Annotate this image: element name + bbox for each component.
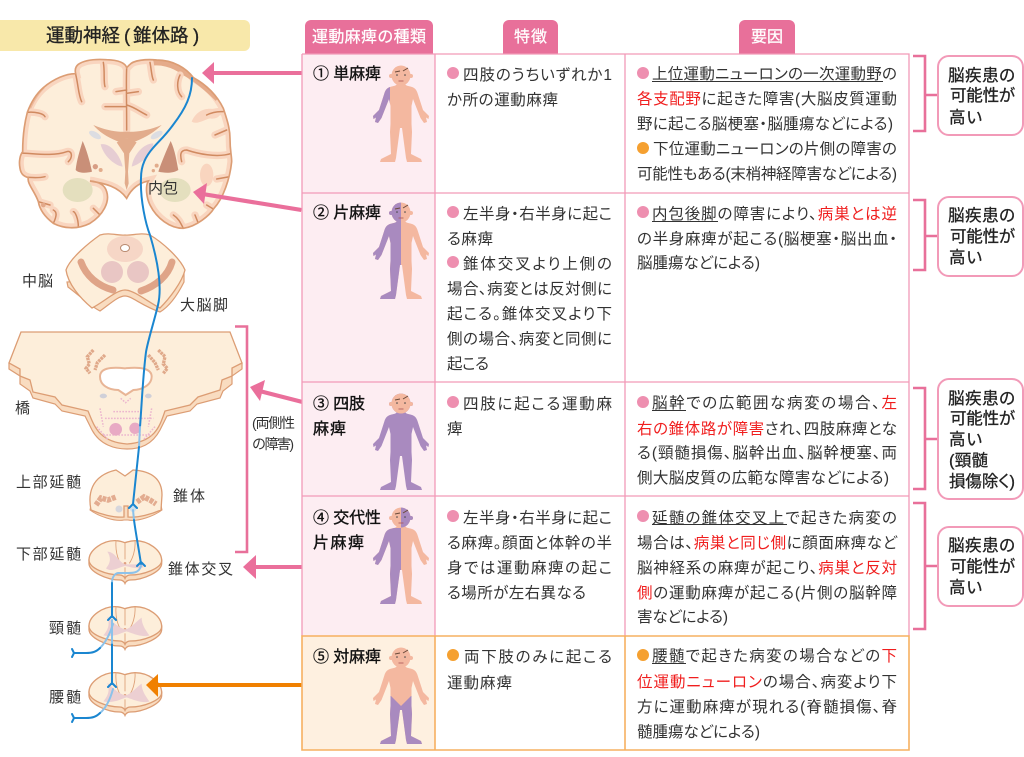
row 2 features: 場合、病変とは反対側に [447,280,612,298]
row 4 features [447,509,612,602]
callout: row 2 brain disease: 可能性が [950,227,1016,246]
row 3 causes: る(頸髄損傷、脳幹出血、脳幹梗塞、両 [637,444,897,462]
row 2 causes: の半身麻痺が起こる(脳梗塞・脳出血・ [637,230,897,248]
row 4 causes: 延髄の錐体交叉上で起きた病変の [652,509,897,527]
row 4: crossed hemiplegia [313,508,898,626]
anatomy labels: 腰髄 [49,689,81,706]
row 3 features: 痺 [447,420,463,438]
row 4 causes [637,509,898,626]
callout: row 4 brain disease: 高い [949,578,982,597]
row 4 features: 左半身・右半身に起こ [463,509,612,527]
row 1: monoplegia [313,65,897,183]
table header: features [503,20,558,54]
arrow: paraplegia to lumbar cord [146,674,304,697]
row 1 features: か所の運動麻痺 [447,91,558,109]
row 5 name: ⑤ 対麻痺 [313,648,381,666]
row 3 features [447,395,612,438]
row 5 causes: 方に運動麻痺が現れる(脊髄損傷、脊 [637,698,897,716]
anatomy labels: (両側性 [252,415,295,431]
row 4 name [313,509,381,552]
illustration: pons [9,332,242,449]
table header: features: 特徴 [514,28,547,46]
row 4 name: ④ 交代性 [313,509,381,527]
row 3: tetraplegia [313,394,897,490]
row 3 causes: 脳幹での広範囲な病変の場合、左 [652,394,897,412]
anatomy labels: 錐体 [173,488,205,505]
table header: types [305,20,433,54]
table header: causes: 要因 [751,28,783,46]
title: 運動神経 [46,25,120,46]
callout: row 4 brain disease: 脳疾患の [948,536,1015,555]
row 1 features [447,66,612,109]
row 4 causes: 脳神経系の麻痺が起こり、病巣と反対 [637,559,897,577]
arrow: crossed hemiplegia to decussation [243,555,304,579]
callout: row 2 brain disease: 高い [949,248,982,267]
anatomy labels: 中脳 [22,273,53,290]
callout: row 3 brain disease: 可能性が [950,409,1016,428]
anatomy labels: 頸髄 [49,620,81,637]
row 1 causes [637,65,897,183]
row 3 features: 四肢に起こる運動麻 [463,395,612,413]
row 2 features: 側の場合、病変と同側に [447,330,612,348]
row 3 causes [637,394,897,487]
arrow: monoplegia to cortex [202,62,304,84]
anatomy labels [15,180,295,706]
callout: row 3 brain disease [913,379,1023,499]
figure: legs affected [373,648,429,744]
row 4 features: 身では運動麻痺の起こ [447,559,612,577]
callout: row 3 brain disease: 脳疾患の [948,389,1015,408]
row 1 name: ① 単麻痺 [313,65,381,83]
row 4 name: 片麻痺 [313,534,364,552]
callout: row 1 brain disease: 高い [949,108,982,127]
anatomy labels: 下部延髄 [16,546,81,563]
row 3 name: 麻痺 [313,420,346,438]
anatomy labels: 橋 [15,400,30,417]
anatomy labels: 内包 [148,180,178,197]
row 5 causes: 位運動ニューロンの場合、病変より下 [637,673,897,691]
title [0,20,250,51]
anatomy labels: 大脳脚 [180,297,228,314]
table header: causes [739,20,795,54]
row 2 causes: 脳腫瘍などによる) [637,254,760,272]
row 1 causes: 野に起こる脳梗塞・脳腫瘍などによる) [637,115,893,133]
row 4 causes: 側の運動麻痺が起こる(片側の脳幹障 [637,584,897,602]
row 5 causes: 髄腫瘍などによる) [637,723,760,741]
illustration: brain coronal section [19,59,232,228]
pons internal details [86,350,167,440]
callout: row 2 brain disease [913,197,1023,276]
row 1 causes: 上位運動ニューロンの一次運動野の [652,65,897,83]
row 2 features: 起こる。錐体交叉より下 [447,305,612,323]
anatomy labels: の障害) [252,436,294,452]
row 2 features: る麻痺 [447,230,493,248]
row 1 features: 四肢のうちいずれか1 [463,66,612,84]
anatomy labels: 上部延髄 [16,474,81,491]
row 3 causes: 側大脳皮質の広範な障害などによる) [637,469,889,487]
row 5 features: 両下肢のみに起こる [464,648,612,666]
illustration: midbrain [66,234,185,312]
figure: all limbs affected [373,394,429,490]
illustration: lower medulla [89,541,162,583]
row 3 name [313,395,365,438]
arrow: tetraplegia to brainstem bracket [250,380,303,404]
figure: arm affected [373,66,429,162]
row 2: hemiplegia [313,202,897,373]
row 1 causes: 各支配野に起きた障害(大脳皮質運動 [637,90,897,108]
illustration: cervical cord [89,607,162,649]
table header: types: 運動麻痺の種類 [312,28,426,46]
row 2 causes: 内包後脚の障害により、病巣とは逆 [652,205,897,223]
callout: row 1 brain disease: 可能性が [950,86,1016,105]
row 4 causes: 場合は、病巣と同じ側に顔面麻痺など [637,534,898,552]
callout: row 1 brain disease: 脳疾患の [948,66,1015,85]
callout: row 4 brain disease: 可能性が [950,557,1016,576]
anatomy labels: 錐体交叉 [168,561,233,578]
title: ) [193,25,199,46]
callout: row 1 brain disease [913,56,1023,135]
row 2 features: 左半身・右半身に起こ [463,205,612,223]
callout: row 3 brain disease: 高い [949,430,982,449]
row 1 causes: 下位運動ニューロンの片側の障害の [653,140,897,158]
callout: row 4 brain disease [913,503,1023,629]
row 4 features: る場所が左右異なる [447,584,586,602]
row 4 features: る麻痺。顔面と体幹の半 [447,534,612,552]
callout: row 2 brain disease: 脳疾患の [948,206,1015,225]
row 5 causes: 腰髄で起きた病変の場合などの下 [652,647,897,665]
row 2 features: 錐体交叉より上側の [463,255,612,273]
title: ( [124,25,131,46]
central structures [41,125,191,207]
row 2 features: 起こる [447,355,489,373]
row 4 causes: 害などによる) [637,608,728,626]
row 5 features [447,648,612,692]
row 1 causes: 可能性もある(末梢神経障害などによる) [637,165,897,183]
row 5: paraplegia [313,647,897,744]
row 3 name: ③ 四肢 [313,395,365,413]
illustration: lumbar cord [89,673,162,715]
callout: row 3 brain disease: 損傷除く) [949,472,1015,491]
figure: left half affected [373,202,429,299]
illustration: upper medulla [90,470,162,520]
row 5 causes [637,647,897,741]
pyramidal tract: blue nerve line [72,78,192,722]
title: 錐体路 [133,25,189,46]
table grid [302,54,909,750]
row 2 name: ② 片麻痺 [313,204,381,222]
row 3 causes: 右の錐体路が障害され、四肢麻痺とな [637,420,897,438]
bracket: bilateral lesion [235,326,247,552]
figure: crossed face and body [373,508,429,604]
arrow: hemiplegia to internal capsule [193,183,302,212]
callout: row 3 brain disease: (頸髄 [949,451,988,470]
row 2 causes [637,205,897,272]
row 5 features: 運動麻痺 [447,674,512,692]
row 2 features [447,205,612,373]
